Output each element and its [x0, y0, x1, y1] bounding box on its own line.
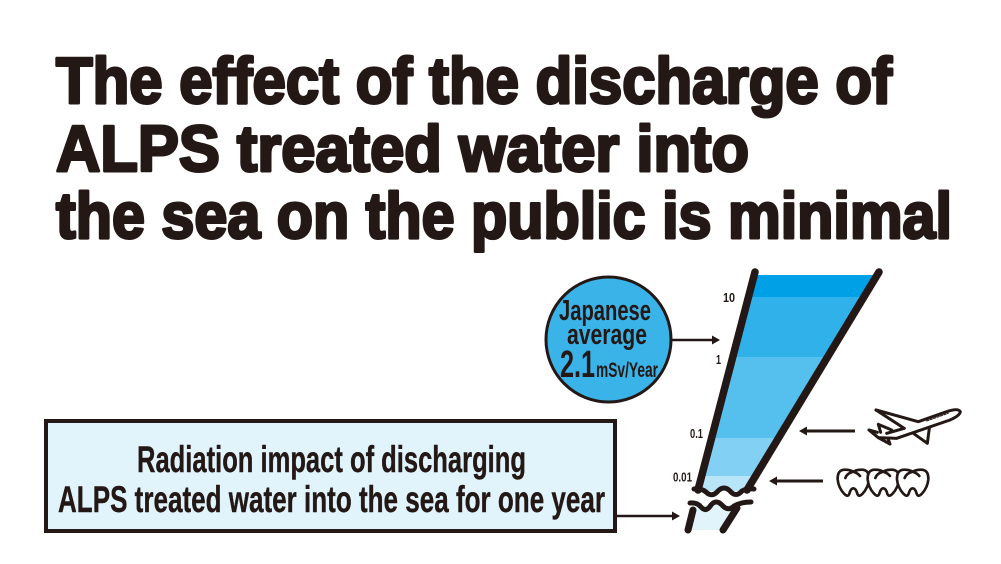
band: 0.1 to 1	[712, 357, 825, 438]
band: below 0.01	[698, 476, 753, 491]
callout: radiation impact box: ALPS treated water into the sea for one year	[58, 479, 605, 520]
callout: Japanese average circle: Japanese	[559, 295, 651, 327]
scale labels: 10	[723, 290, 735, 305]
scale labels: 1	[716, 352, 721, 367]
scale labels: 0.1	[690, 426, 703, 441]
band: 0.01 to 0.1	[702, 438, 776, 476]
callout: Japanese average circle: average	[567, 319, 647, 351]
icon: airplane	[869, 410, 960, 444]
scale wall: lower right	[723, 508, 737, 530]
arrow: average to scale	[672, 336, 720, 344]
title: The effect of the discharge of	[56, 44, 892, 117]
scale wall: left	[698, 272, 755, 490]
callout: Japanese average circle: mSv/Year	[596, 359, 658, 382]
scale labels	[673, 290, 735, 484]
title: ALPS treated water into	[56, 112, 749, 185]
band: 1 to 10	[734, 297, 864, 357]
icon: teeth	[838, 470, 928, 496]
title	[56, 44, 952, 252]
arrow: plane to scale	[799, 426, 855, 436]
scale wall: lower left	[688, 510, 693, 530]
scale labels: 0.01	[673, 470, 692, 484]
callout: radiation impact box: Radiation impact of discharging	[137, 439, 526, 480]
scale wall: right	[747, 272, 879, 490]
band: lower section	[688, 505, 739, 530]
arrow: teeth to scale	[769, 476, 823, 486]
callout: radiation impact box	[46, 421, 615, 531]
break line: upper	[694, 488, 754, 495]
break line: lower	[690, 502, 751, 510]
callout: Japanese average circle	[546, 277, 671, 402]
chart: radiation scale funnel	[688, 272, 879, 530]
callout: Japanese average circle: 2.1	[560, 344, 595, 386]
arrow: box to scale	[616, 512, 680, 520]
band: above 10	[750, 275, 877, 297]
